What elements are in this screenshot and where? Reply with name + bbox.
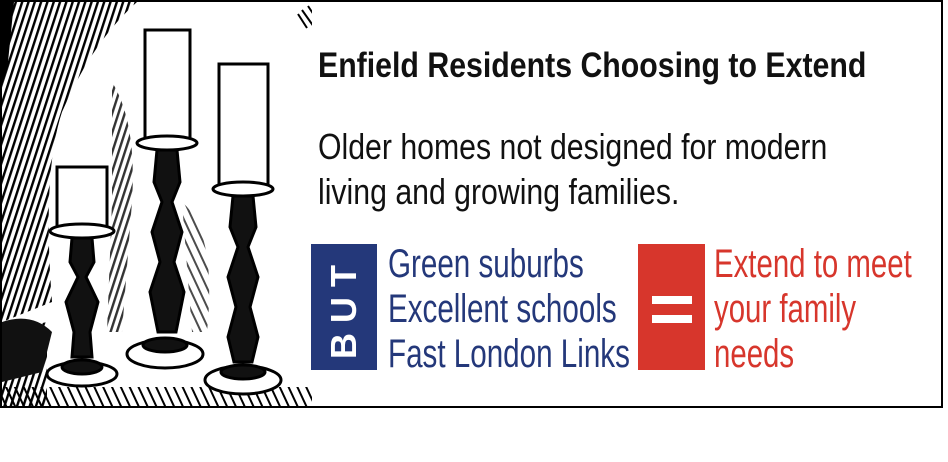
list: benefits: Fast London Links bbox=[388, 332, 630, 376]
subtitle text: living and growing families. bbox=[318, 171, 679, 212]
list: benefits: Excellent schools bbox=[388, 287, 617, 331]
result text bbox=[714, 242, 912, 376]
illustration: candles bbox=[2, 2, 312, 406]
badge: BUT bbox=[311, 244, 377, 370]
right candle bbox=[205, 64, 281, 394]
left candle bbox=[47, 167, 117, 386]
badge: BUT: BUT bbox=[323, 255, 364, 359]
middle candle bbox=[127, 30, 203, 368]
list: benefits bbox=[388, 242, 630, 376]
result text: needs bbox=[714, 332, 794, 376]
list: benefits: Green suburbs bbox=[388, 242, 584, 286]
result text: your family bbox=[714, 287, 856, 331]
title: Enfield Residents Choosing to Extend bbox=[318, 46, 866, 85]
subtitle text bbox=[318, 126, 827, 212]
badge: equals bbox=[638, 244, 705, 370]
subtitle text: Older homes not designed for modern bbox=[318, 126, 827, 167]
result text: Extend to meet bbox=[714, 242, 912, 286]
